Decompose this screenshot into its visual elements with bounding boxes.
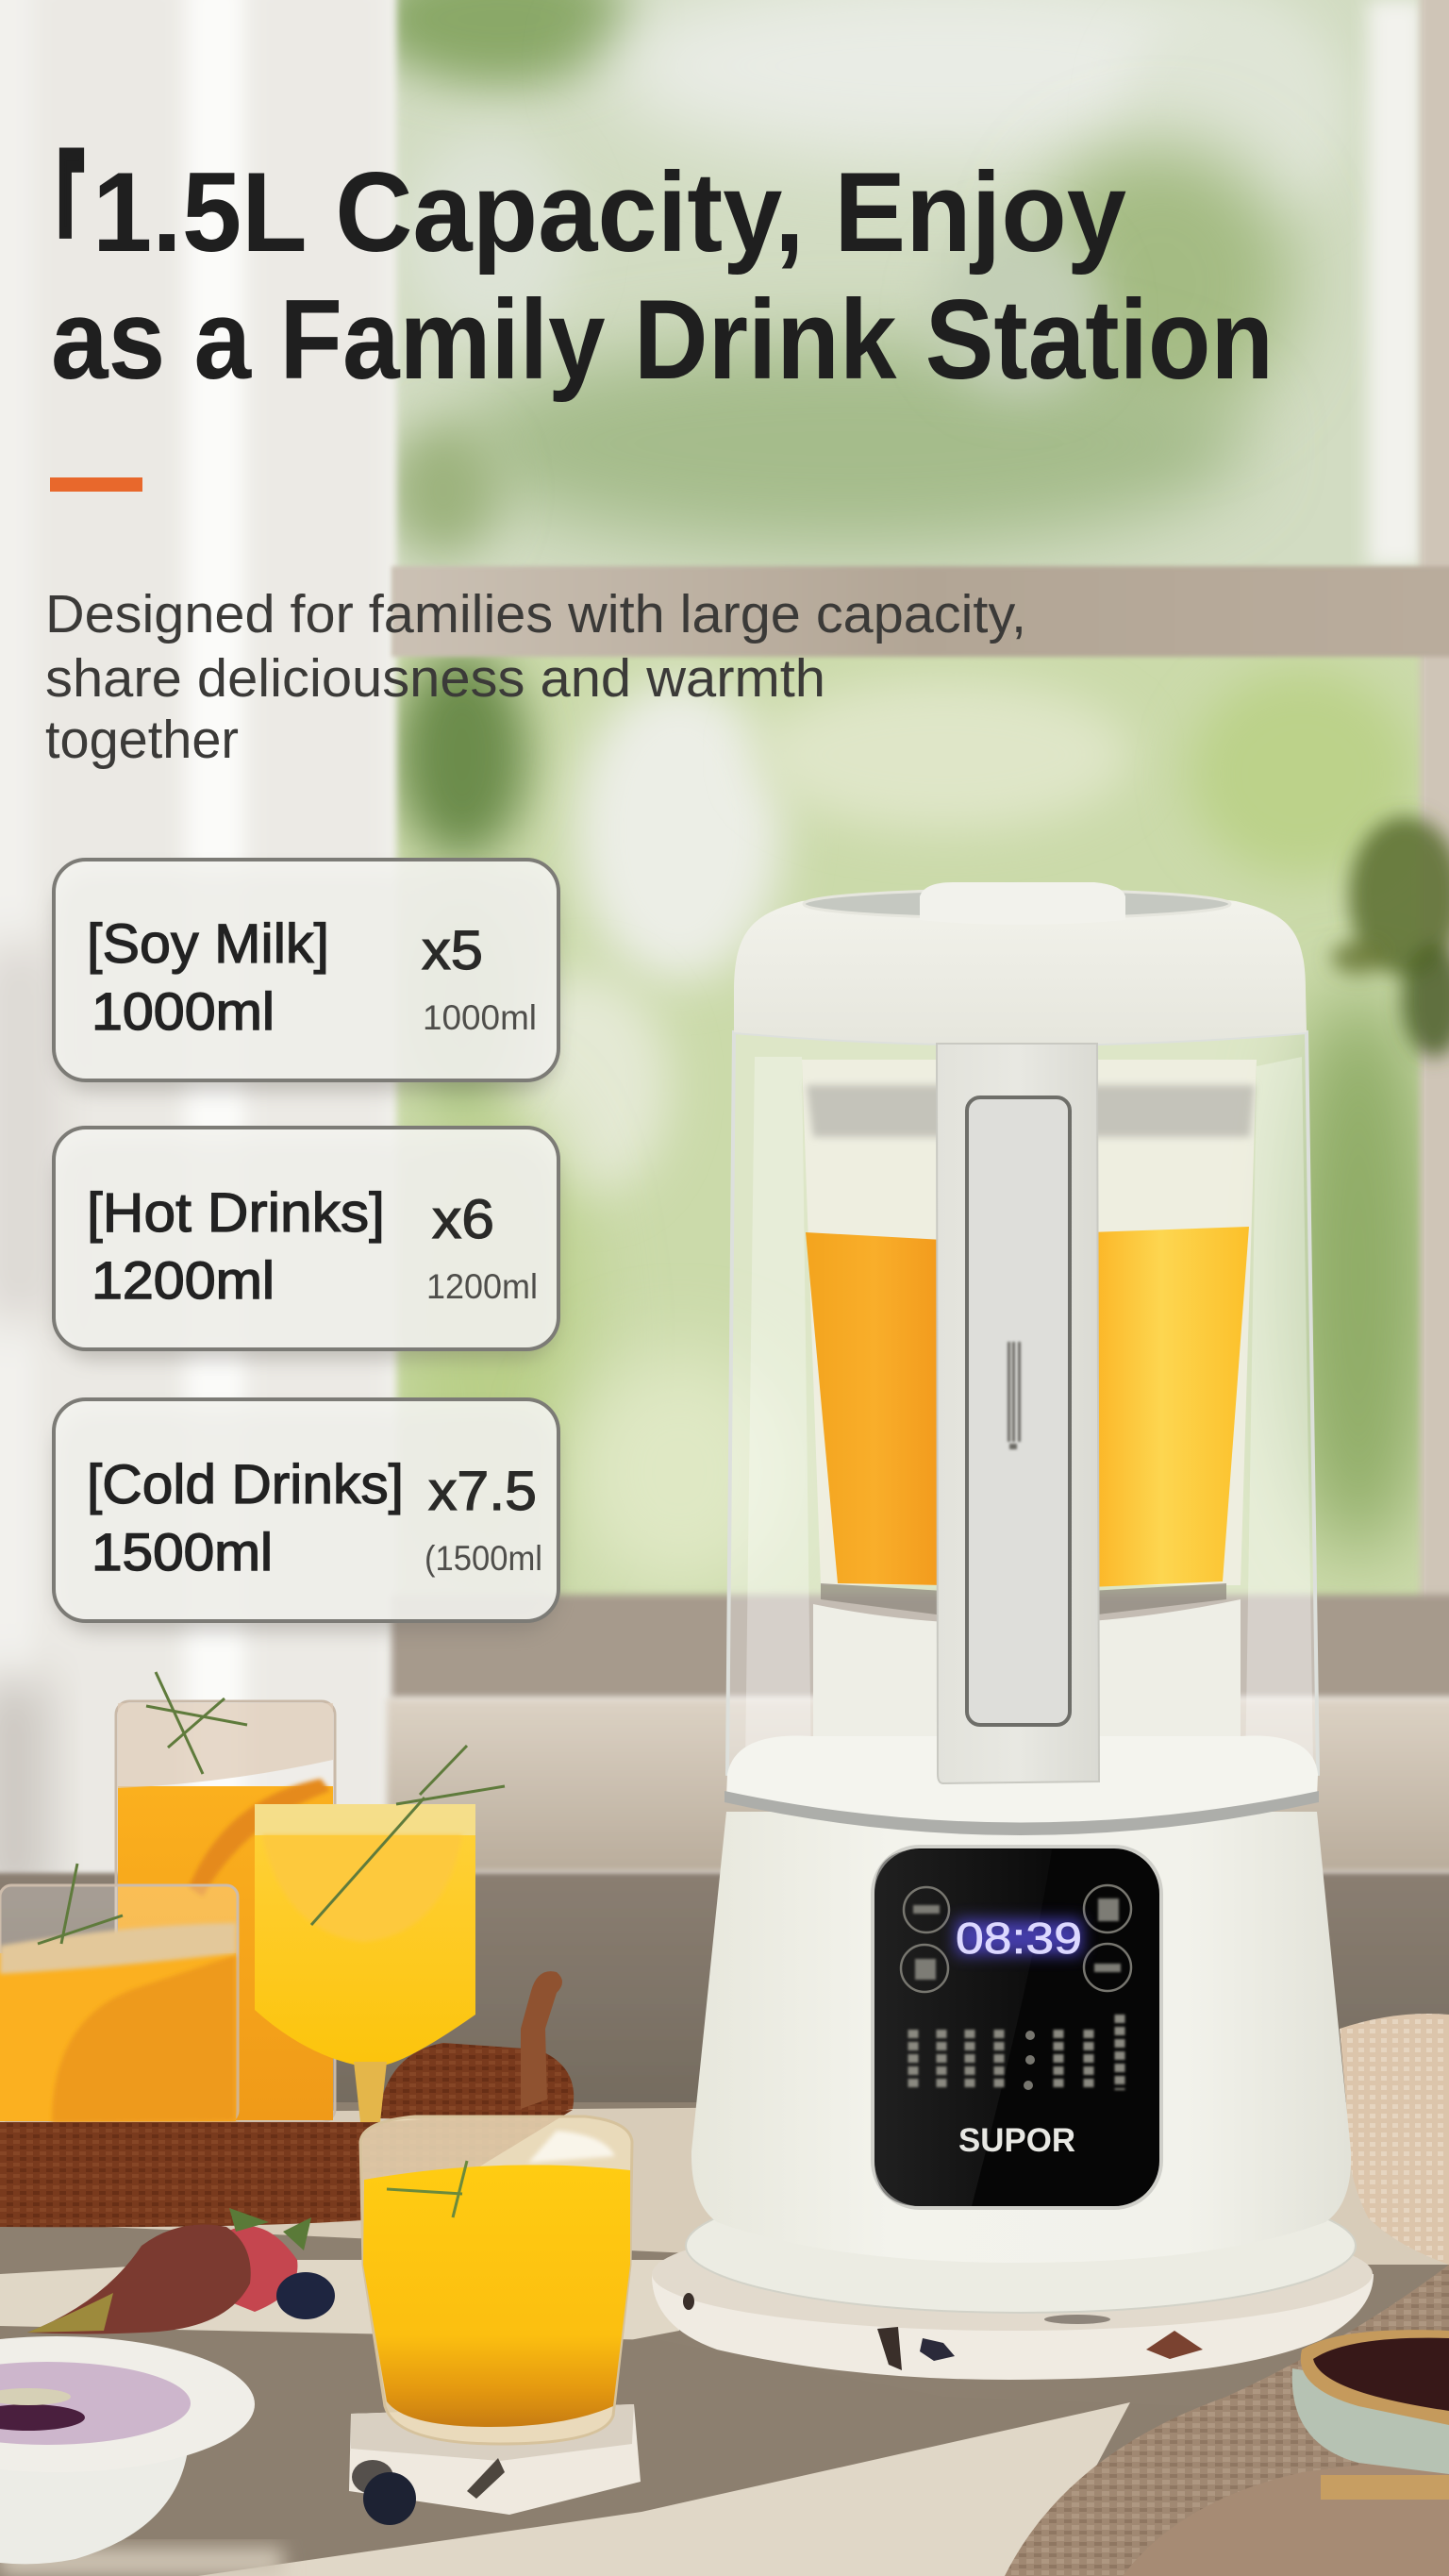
yogurt — [0, 2362, 191, 2445]
mode button icons — [901, 1885, 1131, 1992]
grey seam — [724, 1791, 1319, 1835]
lid glass window — [804, 890, 1230, 918]
soy milk multiplier: x5 — [422, 920, 483, 981]
stem — [354, 2062, 387, 2122]
pitcher collar — [807, 1085, 1255, 1137]
glass highlights — [745, 1057, 811, 1774]
base top plate — [726, 1736, 1318, 1823]
title line 1: 1.5L Capacity, Enjoy — [92, 149, 1126, 276]
fruits — [27, 2208, 335, 2334]
time display: 08:39 — [956, 1914, 1082, 1963]
bowl of purple yogurt — [0, 2336, 255, 2564]
subtitle line 3: together — [45, 710, 239, 770]
strawberry leaves — [229, 2208, 311, 2250]
front glass orange slice — [52, 1955, 236, 2123]
cold drinks volume: 1500ml — [92, 1522, 273, 1581]
fig — [27, 2225, 251, 2334]
stem glass rosemary — [311, 1746, 505, 1925]
blender — [686, 882, 1356, 2313]
lemon slice — [262, 1835, 462, 1942]
card: cold drinks — [54, 1399, 558, 1631]
back glass rosemary — [146, 1672, 247, 1774]
panel sheen — [874, 1849, 1052, 2206]
cold drinks multiplier: x7.5 — [428, 1461, 537, 1522]
lid cap — [920, 882, 1125, 925]
plant at right — [1332, 816, 1449, 1057]
juice left — [806, 1232, 943, 1585]
window garden view — [368, 0, 1434, 1604]
function indicator columns — [913, 2015, 1120, 2090]
hot drinks name: [Hot Drinks] — [87, 1182, 385, 1244]
subtitle line 1: Designed for families with large capacity, — [45, 584, 1026, 644]
blueberry on coaster — [363, 2472, 416, 2525]
small yellow glass — [360, 2116, 632, 2444]
tray handle — [521, 1971, 562, 2109]
curtain — [0, 0, 396, 1906]
hot drinks multiplier: x6 — [432, 1189, 494, 1250]
blender coaster — [652, 2217, 1374, 2380]
base body — [691, 1812, 1351, 2263]
countertop — [0, 2102, 1449, 2576]
front left glass — [0, 1864, 238, 2123]
small glass rosemary — [387, 2161, 467, 2217]
card: hot drinks — [54, 1128, 558, 1360]
card: soy milk — [54, 860, 558, 1092]
small glass rim highlight — [528, 2131, 615, 2163]
orange accent bar — [50, 477, 142, 492]
cold drinks cup size: (1500ml — [425, 1539, 542, 1578]
subtitle line 2: share deliciousness and warmth — [45, 648, 825, 709]
tall back glass — [116, 1672, 335, 2122]
strawberry — [227, 2226, 297, 2312]
handle — [937, 1044, 1099, 1783]
time display glow — [956, 1919, 1082, 1955]
soy milk name: [Soy Milk] — [87, 913, 329, 975]
handle printed mark — [1008, 1342, 1021, 1449]
SUPOR logo: SUPOR — [958, 2122, 1075, 2159]
drink coaster — [349, 2404, 641, 2525]
back glass orange slice — [189, 1779, 330, 1897]
juice right — [1090, 1227, 1249, 1587]
woven tray back rim — [377, 1971, 574, 2121]
soy milk cup size: 1000ml — [423, 998, 537, 1037]
cold drinks name: [Cold Drinks] — [87, 1454, 404, 1515]
front glass rosemary — [38, 1864, 123, 1944]
stemmed glass — [255, 1746, 505, 2122]
control panel — [871, 1845, 1163, 2210]
inner pitcher — [802, 1060, 1257, 1585]
towel at right — [1005, 2014, 1449, 2576]
woven tray front — [0, 2110, 573, 2227]
soy milk volume: 1000ml — [92, 981, 275, 1041]
glass outer jar — [727, 1032, 1318, 1798]
pitcher base shadow — [821, 1583, 1226, 1615]
pedestal — [813, 1599, 1241, 1767]
blueberry — [276, 2272, 335, 2319]
chopstick — [1321, 2475, 1449, 2500]
handle inset — [967, 1097, 1070, 1725]
coaster speckles — [683, 2293, 1203, 2370]
subtitle text — [45, 584, 1026, 770]
title — [25, 147, 1274, 403]
small dish with dark beans — [1292, 2330, 1449, 2500]
title line 2: as a Family Drink Station — [51, 276, 1274, 403]
hot drinks volume: 1200ml — [92, 1250, 275, 1310]
lid — [734, 887, 1307, 1045]
hot drinks cup size: 1200ml — [426, 1267, 538, 1306]
base lower ring — [686, 2179, 1356, 2313]
title opening bracket: 「 — [25, 147, 83, 286]
front glass foam — [0, 1923, 236, 1974]
